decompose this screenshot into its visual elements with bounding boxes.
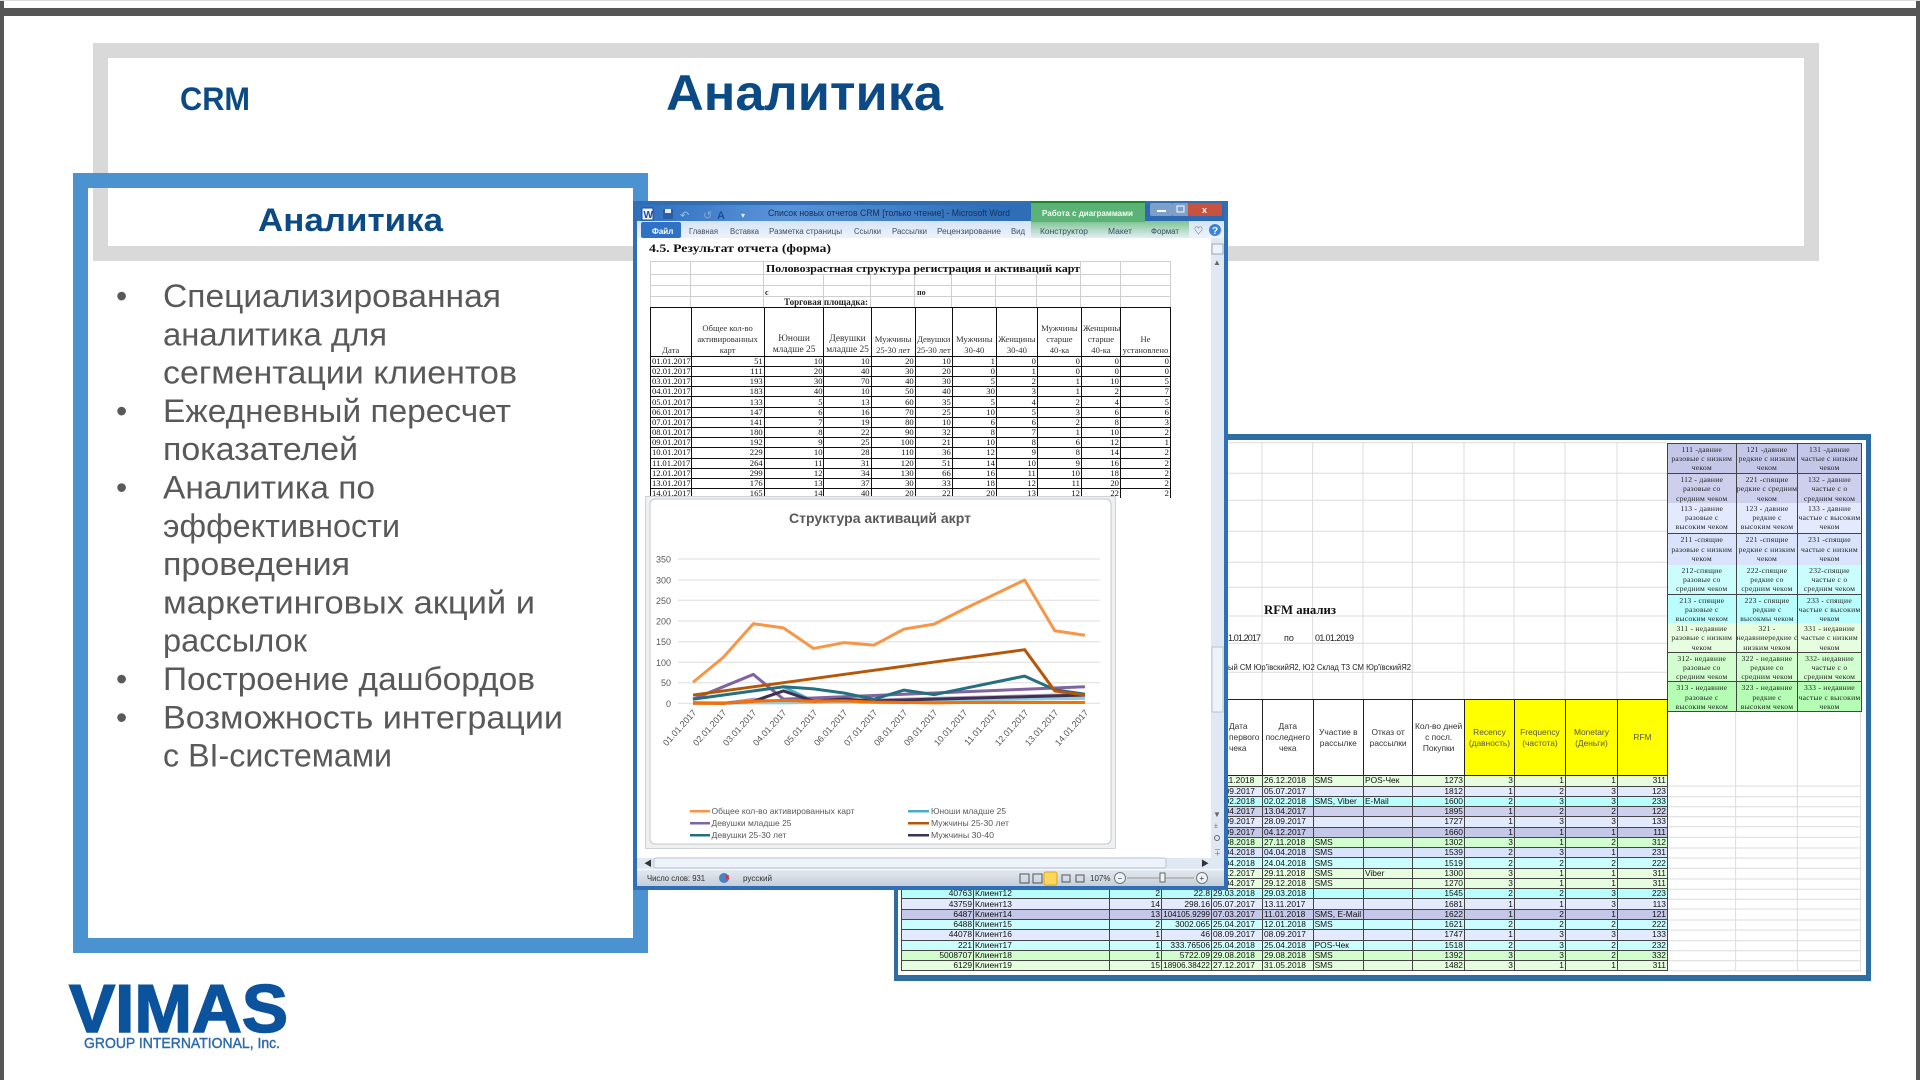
RFM segment legend table: 113 - давние xyxy=(1680,504,1723,513)
bullet list: проведения xyxy=(163,546,350,582)
table: registrations and activations by age and gender: Не xyxy=(1140,334,1150,344)
RFM segment legend table: чеком xyxy=(1757,463,1777,472)
line chart: card activations xyxy=(645,496,1116,849)
window title: Список новых отчетов CRM [только чтение] - Microsoft Word xyxy=(768,208,1010,219)
table: registrations and activations by age and gender xyxy=(650,307,1171,498)
status bar: Число слов: 931 xyxy=(647,874,706,883)
RFM client table: (частота) xyxy=(1522,738,1558,748)
ribbon tabs: Разметка страницы xyxy=(769,227,842,236)
title: CRM: CRM xyxy=(180,81,250,117)
RFM segment legend table: разовые с xyxy=(1685,513,1719,522)
RFM segment legend table: редкие с низким xyxy=(1739,545,1795,554)
bullet list xyxy=(116,278,563,774)
RFM segment legend table: 323 - недавние xyxy=(1742,683,1792,692)
legend xyxy=(690,806,1009,840)
status bar xyxy=(637,870,1224,886)
bullet list: Возможность интеграции xyxy=(163,699,563,735)
status bar: + xyxy=(1200,874,1204,883)
RFM segment legend table: высоким чеком xyxy=(1676,702,1728,711)
RFM segment legend table: высокмы чеком xyxy=(1740,614,1794,623)
RFM client table: Дата xyxy=(1229,721,1248,731)
form header grid xyxy=(650,261,1170,307)
x axis labels: 08.01.2017 xyxy=(872,708,909,748)
ribbon tabs: Конструктор xyxy=(1040,227,1089,236)
y axis labels: 150 xyxy=(656,637,671,647)
RFM segment legend table: 231 -спящие xyxy=(1808,535,1851,544)
RFM segment legend table: средним чеком xyxy=(1804,494,1855,503)
bullet list: сегментации клиентов xyxy=(163,355,517,391)
legend: Общее кол-во активированных карт xyxy=(712,806,855,816)
tab: chart tools: Работа с диаграммами xyxy=(1042,208,1133,218)
RFM segment legend table: 222-спящие xyxy=(1747,566,1787,575)
y axis labels: 200 xyxy=(656,616,671,626)
RFM segment legend table: 332- недавние xyxy=(1805,654,1854,663)
table: registrations and activations by age and gender: Мужчины xyxy=(1041,323,1078,333)
x axis labels: 04.01.2017 xyxy=(751,708,788,748)
section heading: 4.5. Результат отчета (форма) xyxy=(649,241,831,255)
panel: analytics description xyxy=(73,173,648,953)
panel: RFM analysis spreadsheet xyxy=(894,434,1871,981)
status bar: 107% xyxy=(1090,874,1110,883)
bullet list: эффективности xyxy=(163,508,400,544)
window chrome: с xyxy=(765,288,769,297)
panel heading: Аналитика xyxy=(258,202,443,238)
ribbon tabs: Вид xyxy=(1011,227,1025,236)
window buttons xyxy=(1150,203,1222,216)
x axis labels: 14.01.2017 xyxy=(1053,708,1090,748)
icon: word quick access: ↺ xyxy=(703,210,712,222)
grid lines xyxy=(678,559,1100,703)
y axis labels: 0 xyxy=(666,699,671,709)
RFM segment legend table: частые с высоким xyxy=(1799,605,1860,614)
RFM client table: Дата xyxy=(1279,721,1297,731)
bullet list: • xyxy=(116,699,127,735)
x axis labels: 11.01.2017 xyxy=(962,708,999,747)
status bar: − xyxy=(1118,874,1122,883)
bullet list: • xyxy=(116,661,127,697)
top hairline xyxy=(0,0,1920,1)
tab: chart tools xyxy=(1031,201,1189,238)
RFM segment legend table: 133 - давние xyxy=(1808,504,1851,513)
RFM segment legend table xyxy=(1667,443,1862,712)
RFM segment legend table: разовые с xyxy=(1685,605,1719,614)
RFM client table: (Деньги) xyxy=(1575,738,1608,748)
status bar: × xyxy=(725,873,730,882)
x axis labels: 10.01.2017 xyxy=(932,708,969,748)
RFM segment legend table: средним чеком xyxy=(1804,584,1855,593)
RFM segment legend table: разовые с низким xyxy=(1671,454,1732,463)
table: registrations and activations by age and gender: Женщины xyxy=(1083,323,1120,333)
RFM segment legend table: средним чеком xyxy=(1676,672,1727,681)
RFM segment legend table: средним чеком xyxy=(1741,672,1793,681)
RFM client table: Frequency xyxy=(1520,727,1560,737)
RFM segment legend table: редкие с xyxy=(1752,693,1782,702)
table: registrations and activations by age and gender: Девушки xyxy=(917,334,950,344)
chart title: Структура активаций акрт xyxy=(789,510,971,526)
ribbon tabs: Формат xyxy=(1151,227,1179,236)
table: registrations and activations by age and gender: 30-40 xyxy=(964,345,984,355)
bullet list: маркетинговых акций и xyxy=(163,584,535,620)
table: registrations and activations by age and gender: карт xyxy=(720,345,736,355)
table: registrations and activations by age and gender: Мужчины xyxy=(875,334,911,344)
RFM segment legend table: разовые со xyxy=(1683,484,1721,493)
RFM segment legend table: чеком xyxy=(1819,554,1840,563)
RFM client table: рассылке xyxy=(1320,738,1357,748)
RFM segment legend table: частые с о xyxy=(1812,575,1847,584)
ribbon tabs: Макет xyxy=(1108,227,1132,236)
RFM segment legend table: 213 - спящие xyxy=(1679,596,1724,604)
RFM segment legend table: 331 - недавние xyxy=(1804,624,1855,633)
ribbon tabs: ♡ xyxy=(1194,226,1203,236)
RFM client table: последнего xyxy=(1266,732,1310,742)
RFM client table: Отказ от xyxy=(1372,727,1405,737)
window chrome xyxy=(633,201,1228,890)
RFM client table: 18906.38422 xyxy=(1163,961,1210,970)
table: registrations and activations by age and gender: 40-ка xyxy=(1091,345,1111,355)
window chrome: по xyxy=(917,288,926,297)
spreadsheet grid and captions: по xyxy=(1284,633,1294,643)
RFM segment legend table: 223 - спящие xyxy=(1745,596,1789,604)
status bar: русский xyxy=(743,874,772,883)
x axis labels: 01.01.2017 xyxy=(661,708,698,748)
legend: Юноши младше 25 xyxy=(931,806,1006,816)
RFM segment legend table: частые с низким xyxy=(1801,545,1858,554)
legend: Девушки младше 25 xyxy=(712,818,792,828)
y axis labels xyxy=(656,554,671,709)
bullet list: • xyxy=(116,470,127,506)
x axis labels: 09.01.2017 xyxy=(902,708,939,748)
icon: word quick access: W xyxy=(644,210,654,221)
RFM segment legend table: чеком xyxy=(1692,554,1712,563)
RFM client table: рассылки xyxy=(1370,738,1407,748)
y axis labels: 100 xyxy=(656,658,671,668)
vertical scrollbar: ∓ xyxy=(1214,849,1221,857)
RFM segment legend table: 121 -давние xyxy=(1747,445,1787,454)
ribbon tabs: Главная xyxy=(689,227,718,236)
icon: word quick access: ↶ xyxy=(680,210,689,222)
spreadsheet grid and captions xyxy=(1228,442,1861,972)
legend: Девушки 25-30 лет xyxy=(712,830,787,840)
y axis labels: 250 xyxy=(656,596,671,606)
RFM segment legend table: разовые со xyxy=(1683,663,1721,672)
RFM client table: Recency xyxy=(1473,727,1506,737)
table: registrations and activations by age and gender: Женщины xyxy=(998,334,1036,344)
bullet list: • xyxy=(116,393,127,429)
legend: Мужчины 30-40 xyxy=(931,830,994,840)
RFM segment legend table: 322 - недавние xyxy=(1742,654,1792,663)
panel: Word window with report xyxy=(633,201,1228,890)
logo: VIMAS Group International: GROUP INTERNATIONAL, Inc. xyxy=(84,1036,280,1052)
RFM client table: Monetary xyxy=(1574,727,1609,737)
bullet list: Аналитика по xyxy=(163,470,375,506)
RFM segment legend table: разовые с низким xyxy=(1671,545,1732,554)
RFM segment legend table: 212-спящие xyxy=(1681,566,1722,575)
x axis labels: 07.01.2017 xyxy=(842,708,879,748)
x axis labels: 03.01.2017 xyxy=(721,708,758,748)
RFM segment legend table: редкие с xyxy=(1752,513,1782,522)
ribbon tabs: Рассылки xyxy=(892,227,927,236)
bullet list: с BI-системами xyxy=(163,738,392,774)
RFM segment legend table: чеком xyxy=(1819,702,1840,711)
RFM segment legend table: средним чеком xyxy=(1804,672,1855,681)
horizontal scrollbar: ◀ xyxy=(644,859,652,868)
RFM segment legend table: 123 - давние xyxy=(1745,504,1789,513)
RFM segment legend table: чеком xyxy=(1819,463,1840,472)
RFM segment legend table: чеком xyxy=(1819,522,1840,531)
table: registrations and activations by age and gender: Мужчины xyxy=(956,334,993,344)
vertical scrollbar: ▼ xyxy=(1213,810,1221,819)
x axis labels: 13.01.2017 xyxy=(1023,708,1060,748)
window buttons: x xyxy=(1202,205,1207,215)
RFM segment legend table: частые с низким xyxy=(1801,454,1858,463)
RFM segment legend table: редкие с низким xyxy=(1739,454,1795,463)
series lines xyxy=(693,580,1085,703)
ribbon tabs: Рецензирование xyxy=(937,227,1002,236)
RFM segment legend table: 311 - недавние xyxy=(1676,624,1727,633)
RFM client table xyxy=(901,699,1668,971)
spreadsheet grid and captions: ый СМ Юр'ївскийЯ2, Ю2 Склад ТЗ СМ Юр'ївскийЯ2 xyxy=(1228,662,1411,672)
RFM segment legend table: средним чеком xyxy=(1741,584,1793,593)
bullet list: показателей xyxy=(163,431,358,467)
RFM segment legend table: высоким чеком xyxy=(1676,522,1728,531)
RFM segment legend table: низким чеком xyxy=(1743,643,1791,652)
table: registrations and activations by age and gender: 30-40 xyxy=(1007,345,1027,355)
RFM segment legend table: чеком xyxy=(1757,494,1777,503)
table: registrations and activations by age and gender: 25-30 лет xyxy=(917,345,951,355)
table: registrations and activations by age and gender: Девушки xyxy=(829,334,866,344)
RFM segment legend table: чеком xyxy=(1819,614,1840,623)
RFM segment legend table: 221 -спящие xyxy=(1746,475,1788,484)
x axis labels: 06.01.2017 xyxy=(812,708,849,748)
RFM segment legend table: редкие со xyxy=(1750,575,1784,584)
RFM segment legend table: частые с низким xyxy=(1801,633,1858,642)
RFM segment legend table: недавниередкие с xyxy=(1737,633,1798,642)
ribbon tabs: Вставка xyxy=(730,227,760,236)
legend: Мужчины 25-30 лет xyxy=(931,818,1009,828)
bullet list: рассылок xyxy=(163,623,308,659)
RFM segment legend table: 232-спящие xyxy=(1809,566,1850,575)
top slide bar xyxy=(0,8,1920,16)
bullet list: Специализированная xyxy=(163,278,501,314)
vertical scrollbar: ± xyxy=(1214,823,1218,830)
RFM segment legend table: 111 -давние xyxy=(1682,445,1722,454)
table: registrations and activations by age and gender: 40-ка xyxy=(1050,345,1069,355)
RFM segment legend table: 333 - недавние xyxy=(1804,683,1855,692)
window chrome: Торговая площадка: xyxy=(784,297,868,307)
RFM segment legend table: редкие со xyxy=(1750,663,1784,672)
ribbon tabs: Файл xyxy=(652,227,673,236)
ribbon tabs xyxy=(641,222,1221,238)
RFM segment legend table: 313 - недавние xyxy=(1676,683,1727,692)
RFM segment legend table: средним чеком xyxy=(1676,494,1727,503)
RFM client table: RFM xyxy=(1633,732,1652,742)
y axis labels: 50 xyxy=(661,678,671,688)
left slide edge xyxy=(0,1,4,1080)
RFM segment legend table: 312- недавние xyxy=(1677,654,1726,663)
RFM client table: с посл. xyxy=(1425,732,1452,742)
RFM segment legend table: высоким чеком xyxy=(1741,702,1793,711)
right slide edge xyxy=(1916,1,1920,1080)
bullet list: аналитика для xyxy=(163,316,387,352)
RFM segment legend table: 112 - давние xyxy=(1680,475,1723,484)
RFM segment legend table: частые с о xyxy=(1812,663,1847,672)
RFM client table: чека xyxy=(1279,743,1297,753)
table: registrations and activations by age and gender: Дата xyxy=(662,345,679,355)
RFM segment legend table: разовые со xyxy=(1683,575,1721,584)
report table title: Половозрастная структура регистрация и активаций карт xyxy=(766,264,1081,275)
ribbon tabs: Ссылки xyxy=(854,227,881,236)
table: registrations and activations by age and gender: активированных xyxy=(697,334,758,344)
table: registrations and activations by age and gender: 25-30 лет xyxy=(876,345,910,355)
RFM segment legend table: чеком xyxy=(1757,554,1777,563)
RFM client table: первого xyxy=(1229,732,1259,742)
title: Аналитика: Аналитика xyxy=(666,65,944,121)
table: registrations and activations by age and gender: старше xyxy=(1046,334,1073,344)
RFM client table: Покупки xyxy=(1423,743,1454,753)
RFM segment legend table: разовые с низким xyxy=(1671,633,1732,642)
x axis labels: 05.01.2017 xyxy=(782,708,819,748)
RFM segment legend table: высоким чеком xyxy=(1676,614,1728,623)
bullet list: • xyxy=(116,278,127,314)
vertical scrollbar xyxy=(1211,238,1224,858)
y axis labels: 300 xyxy=(656,576,671,586)
table: registrations and activations by age and gender: Общее кол-во xyxy=(702,323,753,333)
RFM segment legend table: 131 -давние xyxy=(1809,445,1850,454)
x axis labels: 02.01.2017 xyxy=(691,708,728,748)
RFM client table: Участие в xyxy=(1319,727,1358,737)
RFM segment legend table: частые с высоким xyxy=(1799,693,1860,702)
RFM segment legend table: 211 -спящие xyxy=(1681,535,1723,544)
RFM segment legend table: редкие с xyxy=(1752,605,1782,614)
icon: word quick access: ▾ xyxy=(741,211,745,220)
RFM segment legend table: чеком xyxy=(1819,643,1840,652)
table: registrations and activations by age and gender: младше 25 xyxy=(826,345,869,355)
bullet list: Построение дашбордов xyxy=(163,661,535,697)
table: registrations and activations by age and gender: установлено xyxy=(1123,345,1168,355)
RFM segment legend table: 321 - xyxy=(1758,624,1776,633)
RFM client table: чека xyxy=(1229,743,1247,753)
RFM segment legend table: высоким чеком xyxy=(1741,522,1793,531)
RFM segment legend table: разовые с xyxy=(1685,693,1719,702)
RFM client table: (давность) xyxy=(1469,738,1510,748)
RFM segment legend table: частые с высоким xyxy=(1799,513,1860,522)
RFM client table: 104105.9299 xyxy=(1163,910,1210,919)
table: registrations and activations by age and gender: старше xyxy=(1088,334,1114,344)
header frame xyxy=(93,43,1819,261)
table: registrations and activations by age and gender: Юноши xyxy=(778,334,810,344)
vertical scrollbar: ▲ xyxy=(1213,258,1221,267)
icon: word quick access: A xyxy=(717,210,725,222)
ribbon tabs: ? xyxy=(1212,226,1218,237)
table: registrations and activations by age and gender: младше 25 xyxy=(773,345,815,355)
x axis labels xyxy=(661,708,1090,748)
RFM segment legend table: редкие с средним xyxy=(1737,484,1797,493)
horizontal scrollbar: ▶ xyxy=(1201,859,1209,868)
logo: VIMAS Group International: VIMAS xyxy=(69,971,288,1047)
RFM segment legend table: частые с о xyxy=(1812,484,1847,493)
RFM client table: Кол-во дней xyxy=(1415,721,1462,731)
RFM segment legend table: средним чеком xyxy=(1676,584,1727,593)
spreadsheet grid and captions: RFM анализ xyxy=(1264,603,1336,617)
icon: word quick access xyxy=(642,208,745,222)
spreadsheet grid and captions: 1.01.2017 xyxy=(1228,633,1261,643)
RFM segment legend table: 221 -спящие xyxy=(1746,535,1788,544)
y axis labels: 350 xyxy=(656,554,671,564)
RFM segment legend table: 233 - спящие xyxy=(1807,596,1852,604)
spreadsheet grid and captions: 01.01.2019 xyxy=(1315,633,1354,643)
x axis labels: 12.01.2017 xyxy=(993,708,1030,748)
RFM segment legend table: чеком xyxy=(1692,463,1712,472)
horizontal scrollbar xyxy=(637,858,1224,869)
bullet list: Ежедневный пересчет xyxy=(163,393,511,429)
RFM segment legend table: 132 - давние xyxy=(1808,475,1851,484)
RFM segment legend table: чеком xyxy=(1692,643,1712,652)
